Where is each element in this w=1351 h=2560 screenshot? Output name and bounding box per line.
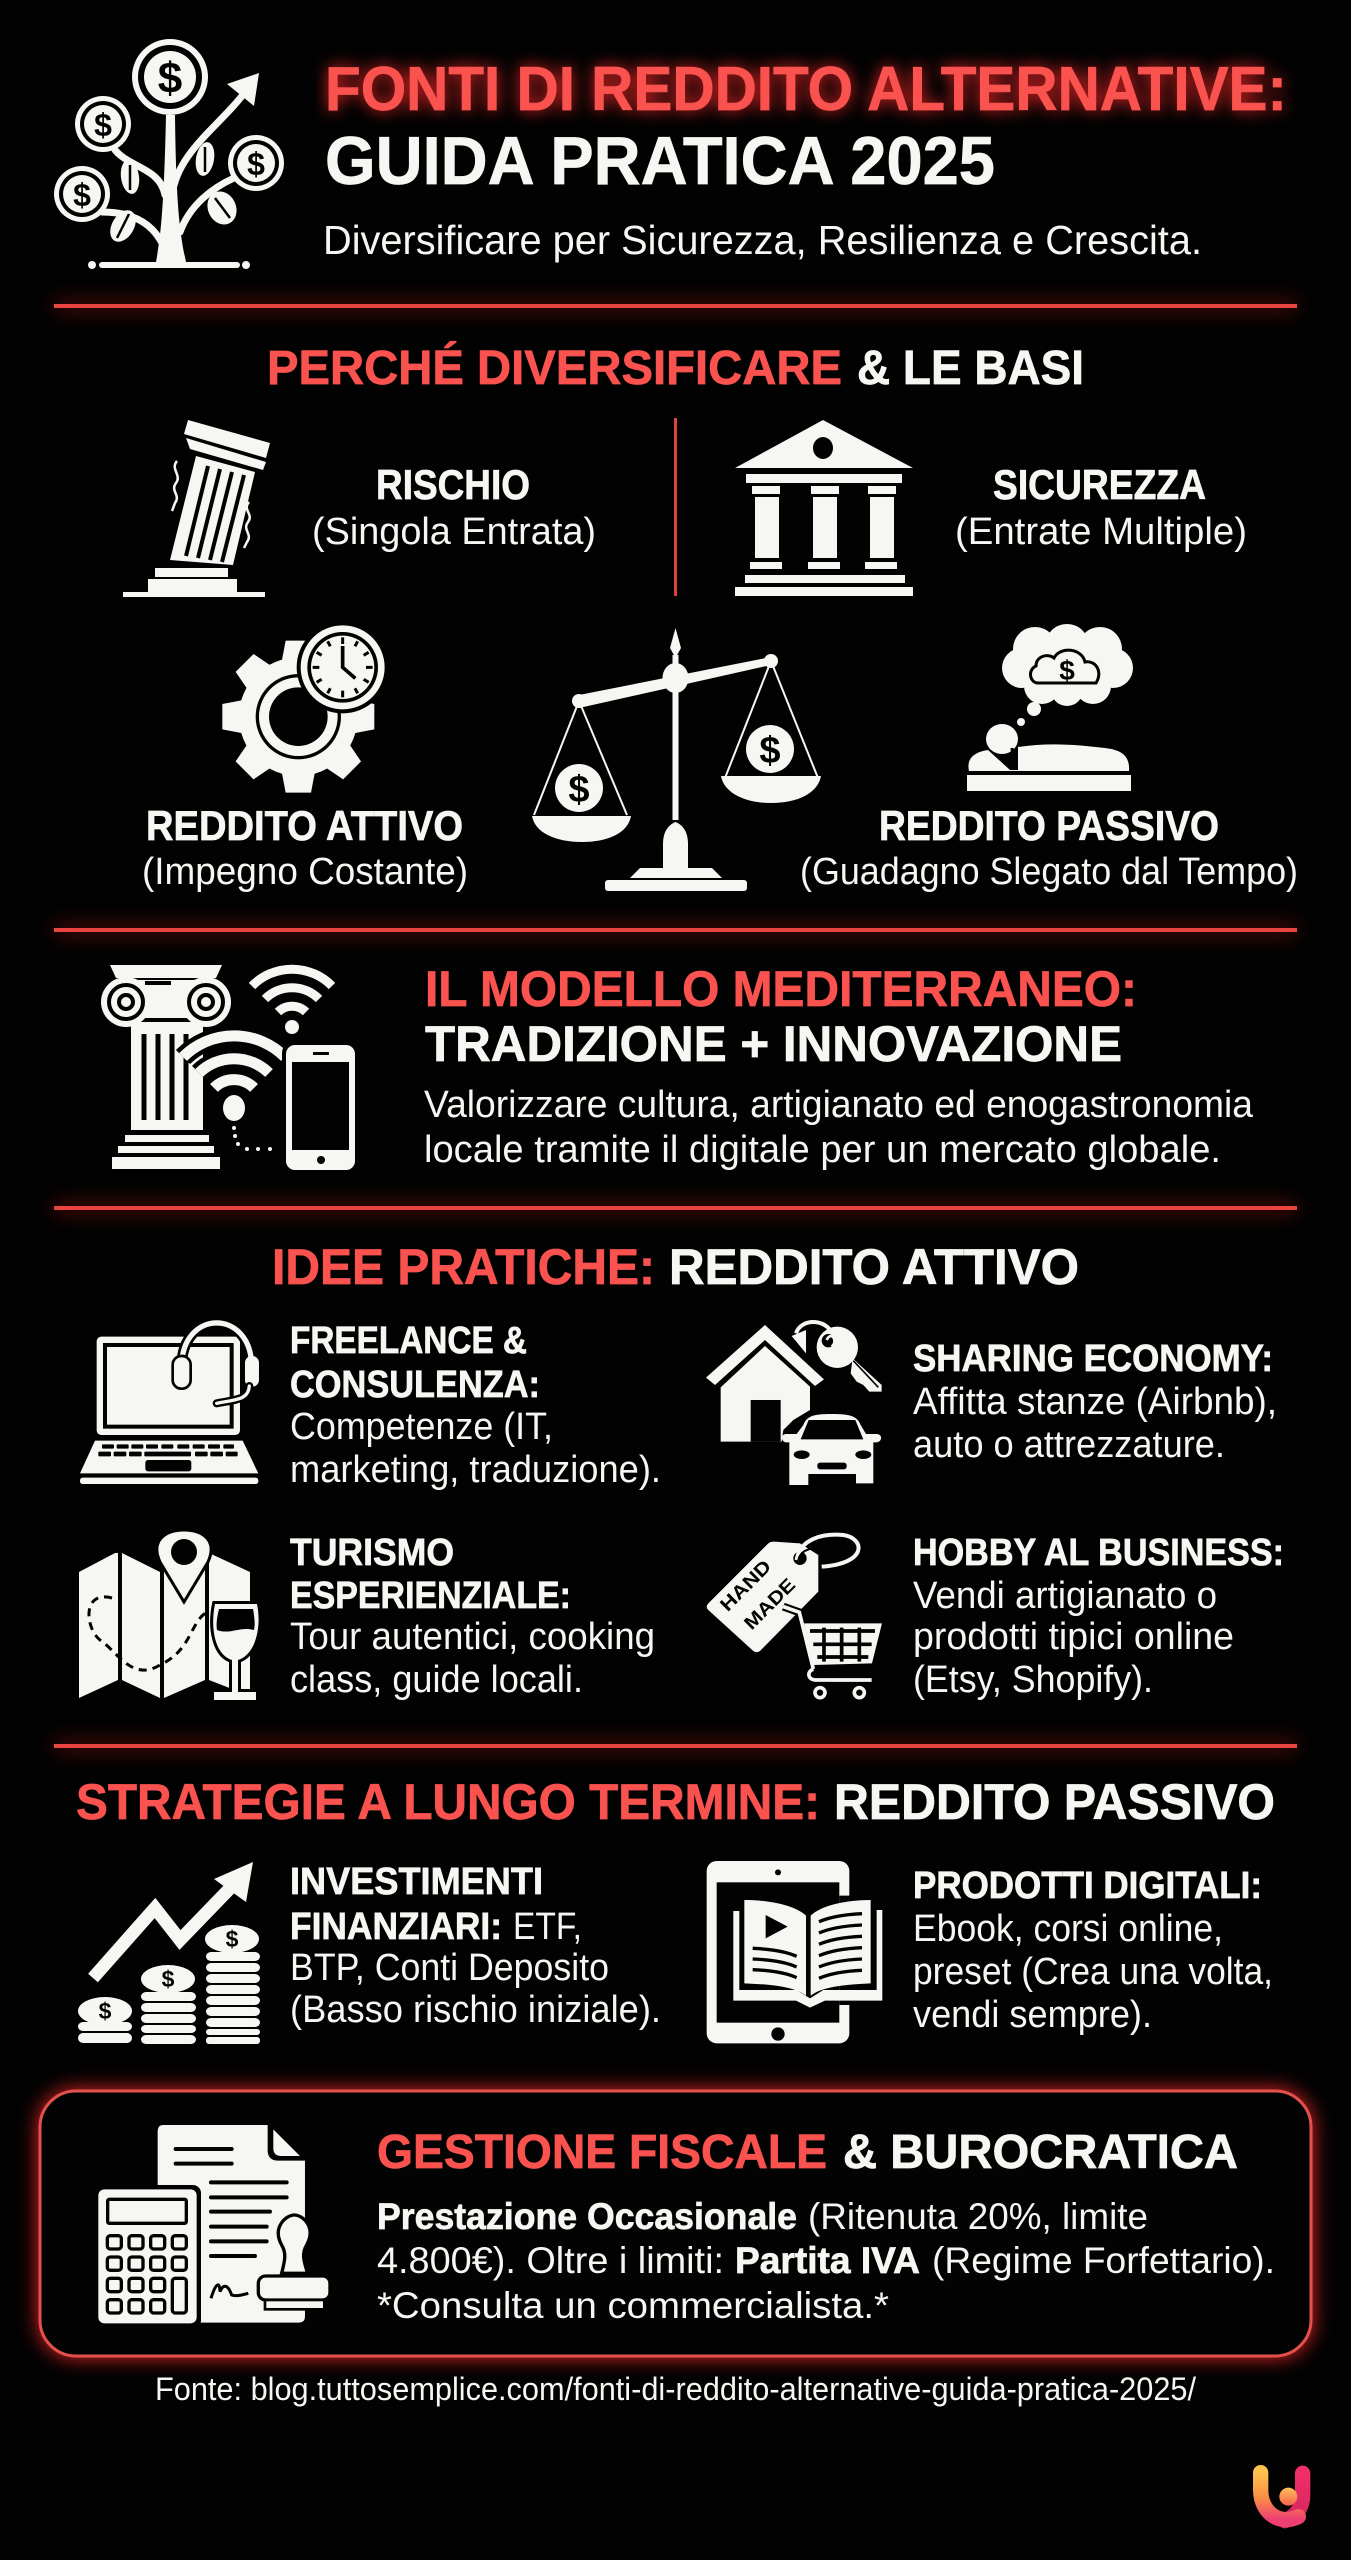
text: turismo esperienziale: class, guide locali.	[290, 1659, 583, 1701]
text: investimenti finanziari: BTP, Conti Deposito	[290, 1947, 609, 1989]
icon: gear and clock	[222, 621, 389, 793]
title: FONTI DI REDDITO ALTERNATIVE:	[325, 55, 1287, 124]
text: regime fiscale: 4.800€). Oltre i limiti:	[377, 2240, 724, 2281]
text: rischio: (Singola Entrata)	[312, 511, 596, 553]
icon: broken column	[123, 420, 270, 597]
text: prodotti digitali: PRODOTTI DIGITALI:	[913, 1865, 1262, 1907]
heading: strategie a lungo termine: REDDITO PASSIVO	[834, 1774, 1275, 1830]
text: prodotti digitali: preset (Crea una volta,	[913, 1951, 1273, 1993]
text: regime fiscale: (Regime Forfettario).	[932, 2240, 1275, 2281]
icon: house key and car	[706, 1322, 882, 1485]
text: investimenti finanziari: (Basso rischio iniziale).	[290, 1989, 661, 2031]
text: turismo esperienziale: Tour autentici, cooking	[290, 1616, 655, 1658]
text: turismo esperienziale: TURISMO	[290, 1532, 454, 1574]
text: sharing economy: auto o attrezzature.	[913, 1424, 1225, 1466]
icon: growth arrow and coin stacks: $	[226, 1926, 239, 1952]
block: modello mediterraneo: locale tramite il digitale per un mercato globale.	[424, 1129, 1221, 1171]
text: investimenti finanziari: ETF,	[513, 1906, 582, 1948]
source: Fonte: blog.tuttosemplice.com/fonti-di-reddito-alternative-guida-pratica-2025/	[155, 2371, 1196, 2407]
heading: idee pratiche: IDEE PRATICHE:	[272, 1239, 655, 1295]
heading: perché diversificare: & LE BASI	[857, 342, 1084, 395]
title: Diversificare per Sicurezza, Resilienza e Crescita.	[323, 217, 1202, 263]
text: reddito attivo	[142, 802, 468, 893]
text: reddito attivo: (Impegno Costante)	[142, 851, 468, 893]
text: freelance: FREELANCE &	[290, 1320, 527, 1362]
text: rischio: RISCHIO	[376, 461, 530, 508]
text: prodotti digitali: vendi sempre).	[913, 1994, 1152, 2036]
text: regime fiscale: (Ritenuta 20%, limite	[808, 2196, 1148, 2237]
text: reddito passivo	[800, 802, 1298, 893]
icon: money tree: $	[73, 177, 91, 213]
heading: gestione fiscale	[377, 2126, 1238, 2179]
text: hobby al business: prodotti tipici online	[913, 1616, 1234, 1658]
icon: map with pin and wine	[79, 1530, 259, 1700]
text: reddito passivo: (Guadagno Slegato dal Tempo)	[800, 851, 1298, 893]
text: hobby al business	[913, 1532, 1284, 1701]
icon: sleeping on passive income	[967, 624, 1133, 791]
heading: idee pratiche	[272, 1239, 1079, 1295]
text: freelance: CONSULENZA:	[290, 1364, 540, 1406]
title: GUIDA PRATICA 2025	[325, 123, 995, 199]
heading: strategie a lungo termine: STRATEGIE A LUNGO TERMINE:	[76, 1774, 820, 1830]
text: regime fiscale: Partita IVA	[735, 2240, 920, 2281]
text: sicurezza: SICUREZZA	[993, 461, 1206, 508]
text: sharing economy: SHARING ECONOMY:	[913, 1338, 1273, 1380]
icon: temple	[735, 420, 913, 596]
icon: calculator document and stamp	[95, 2125, 330, 2328]
icon: tablet with book	[707, 1861, 882, 2043]
panel: gestione fiscale	[40, 2091, 1311, 2356]
text: freelance	[290, 1320, 661, 1491]
text: investimenti finanziari: INVESTIMENTI	[290, 1861, 543, 1903]
heading: strategie a lungo termine	[76, 1774, 1275, 1830]
text: investimenti finanziari: FINANZIARI:	[290, 1906, 502, 1948]
text: turismo esperienziale: ESPERIENZIALE:	[290, 1575, 571, 1617]
text: reddito attivo: REDDITO ATTIVO	[146, 802, 463, 849]
block: modello mediterraneo: Valorizzare cultura, artigianato ed enogastronomia	[424, 1084, 1254, 1126]
text: prodotti digitali	[913, 1865, 1273, 2036]
icon: growth arrow and coin stacks: $	[99, 1998, 112, 2024]
icon: handmade tag and cart: MADE	[740, 1574, 799, 1634]
text: sicurezza: (Entrate Multiple)	[955, 511, 1247, 553]
text: sharing economy	[913, 1338, 1277, 1466]
text: rischio	[312, 461, 596, 553]
icon: sleeping on passive income: $	[1059, 655, 1075, 686]
icon: growth arrow and coin stacks	[78, 1862, 260, 2044]
text: prodotti digitali: Ebook, corsi online,	[913, 1908, 1223, 1950]
icon: balance scale	[532, 628, 821, 891]
text: freelance: marketing, traduzione).	[290, 1449, 661, 1491]
icon: balance scale: $	[759, 730, 781, 772]
heading: perché diversificare: PERCHÉ DIVERSIFICARE	[267, 341, 842, 395]
text: hobby al business: HOBBY AL BUSINESS:	[913, 1532, 1284, 1574]
text: sharing economy: Affitta stanze (Airbnb),	[913, 1381, 1277, 1423]
text: hobby al business: Vendi artigianato o	[913, 1575, 1217, 1617]
icon: laptop with headset	[80, 1323, 259, 1484]
icon: money tree: $	[158, 54, 182, 103]
text: regime fiscale	[377, 2196, 1275, 2326]
title	[323, 55, 1287, 263]
icon: growth arrow and coin stacks: $	[162, 1966, 175, 1992]
logo	[1261, 2473, 1303, 2521]
text: sicurezza	[955, 461, 1247, 553]
heading: idee pratiche: REDDITO ATTIVO	[669, 1239, 1079, 1295]
text: reddito passivo: REDDITO PASSIVO	[879, 802, 1219, 849]
block: modello mediterraneo: IL MODELLO MEDITERRANEO:	[425, 961, 1137, 1017]
heading: gestione fiscale: & BUROCRATICA	[843, 2126, 1238, 2179]
text: freelance: Competenze (IT,	[290, 1406, 553, 1448]
text: regime fiscale: Prestazione Occasionale	[377, 2196, 797, 2237]
icon: balance scale: $	[568, 769, 590, 811]
text: regime fiscale: *Consulta un commercialista.*	[377, 2285, 889, 2326]
text: turismo esperienziale	[290, 1532, 655, 1701]
icon: ionic column with wifi and phone	[101, 965, 359, 1174]
icon: handmade tag and cart: HAND	[716, 1556, 775, 1615]
block: modello mediterraneo: TRADIZIONE + INNOVAZIONE	[425, 1016, 1122, 1072]
heading: gestione fiscale: GESTIONE FISCALE	[377, 2126, 827, 2179]
icon: money tree: $	[94, 107, 112, 143]
icon: money tree: $	[247, 146, 265, 182]
block: modello mediterraneo	[424, 961, 1254, 1171]
icon: handmade tag and cart	[707, 1535, 882, 1698]
icon: money tree	[54, 39, 284, 269]
text: investimenti finanziari	[290, 1861, 661, 2031]
text: hobby al business: (Etsy, Shopify).	[913, 1659, 1153, 1701]
